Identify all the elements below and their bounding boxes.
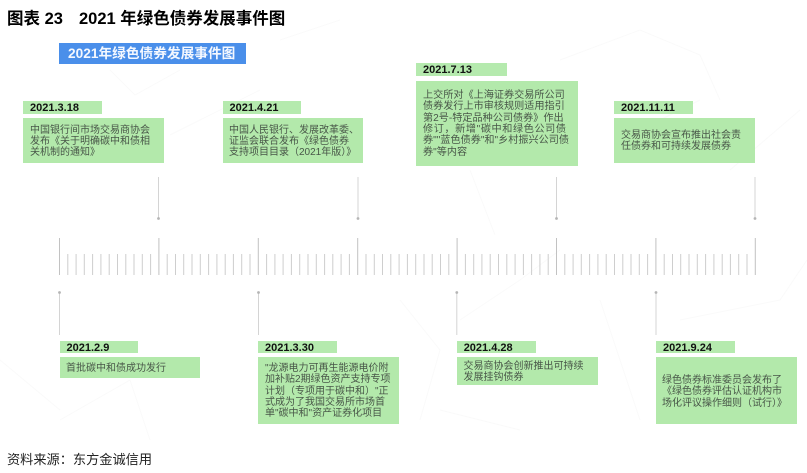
event: 2021.3.30: "龙源电力可再生能源电价附 (265, 363, 389, 374)
event: 2021.7.13: 2021.7.13 (423, 64, 472, 76)
event: 2021.4.28: 2021.4.28 (464, 342, 513, 354)
event: 2021.7.13: 上交所对《上海证券交易所公司 (423, 90, 565, 101)
event: 2021.3.30: 式成为了我国交易所市场首 (265, 397, 385, 408)
title: 2021 年绿色债券发展事件图 (79, 10, 285, 28)
event: 2021.7.13: 券""蓝色债券"和"乡村振兴公司债 (423, 135, 569, 146)
event: 2021.11.11: 任债券和可持续发展债券 (621, 141, 731, 152)
event: 2021.4.21: 证监会联合发布《绿色债券 (229, 136, 349, 147)
event: 2021.11.11: 交易商协会宣布推出社会责 (621, 130, 741, 141)
event: 2021.3.30: 加补贴2期绿色资产支持专项 (265, 374, 391, 385)
event: 2021.9.24: 绿色债券标准委员会发布了 (662, 375, 782, 386)
event: 2021.4.21: 中国人民银行、发展改革委、 (229, 124, 359, 136)
event: 2021.7.13: 修订，新增"碳中和绿色公司债 (423, 124, 567, 135)
event: 2021.3.18: 中国银行间市场交易商协会 (30, 124, 150, 136)
event: 2021.2.9: 首批碳中和债成功发行 (66, 363, 166, 374)
event: 2021.4.21: 2021.4.21 (230, 102, 278, 114)
event: 2021.3.18: 关机制的通知》 (30, 147, 100, 158)
title: 图表 23 (7, 10, 63, 28)
event: 2021.4.28: 发展挂钩债券 (464, 372, 524, 383)
event: 2021.7.13: 债券发行上市审核规则适用指引 (423, 101, 565, 112)
event: 2021.4.28: 交易商协会创新推出可持续 (464, 361, 584, 372)
event: 2021.9.24: 场化评议操作细则（试行）》 (662, 398, 787, 409)
event: 2021.3.18: 发布《关于明确碳中和债相 (30, 136, 150, 147)
chart heading banner (59, 43, 246, 64)
event: 2021.3.18: 2021.3.18 (30, 102, 79, 114)
event: 2021.4.21: 支持项目目录（2021年版）》 (229, 147, 356, 158)
chart heading banner: 2021年绿色债券发展事件图 (68, 46, 235, 61)
event: 2021.7.13: 券"等内容 (423, 147, 467, 158)
event: 2021.7.13: 第2号-特定品种公司债券》作出 (423, 113, 564, 124)
event: 2021.11.11: 2021.11.11 (621, 102, 675, 114)
event: 2021.3.30: 2021.3.30 (265, 342, 314, 354)
event: 2021.9.24: 《绿色债券评估认证机构市 (662, 386, 782, 397)
event: 2021.3.30: 单"碳中和"资产证券化项目 (265, 408, 382, 419)
event: 2021.3.30: 计划（专项用于碳中和）"正 (265, 386, 389, 397)
event: 2021.9.24: 2021.9.24 (663, 342, 712, 354)
source note: 资料来源：东方金诚信用 (7, 452, 152, 467)
event: 2021.2.9: 2021.2.9 (66, 342, 109, 354)
